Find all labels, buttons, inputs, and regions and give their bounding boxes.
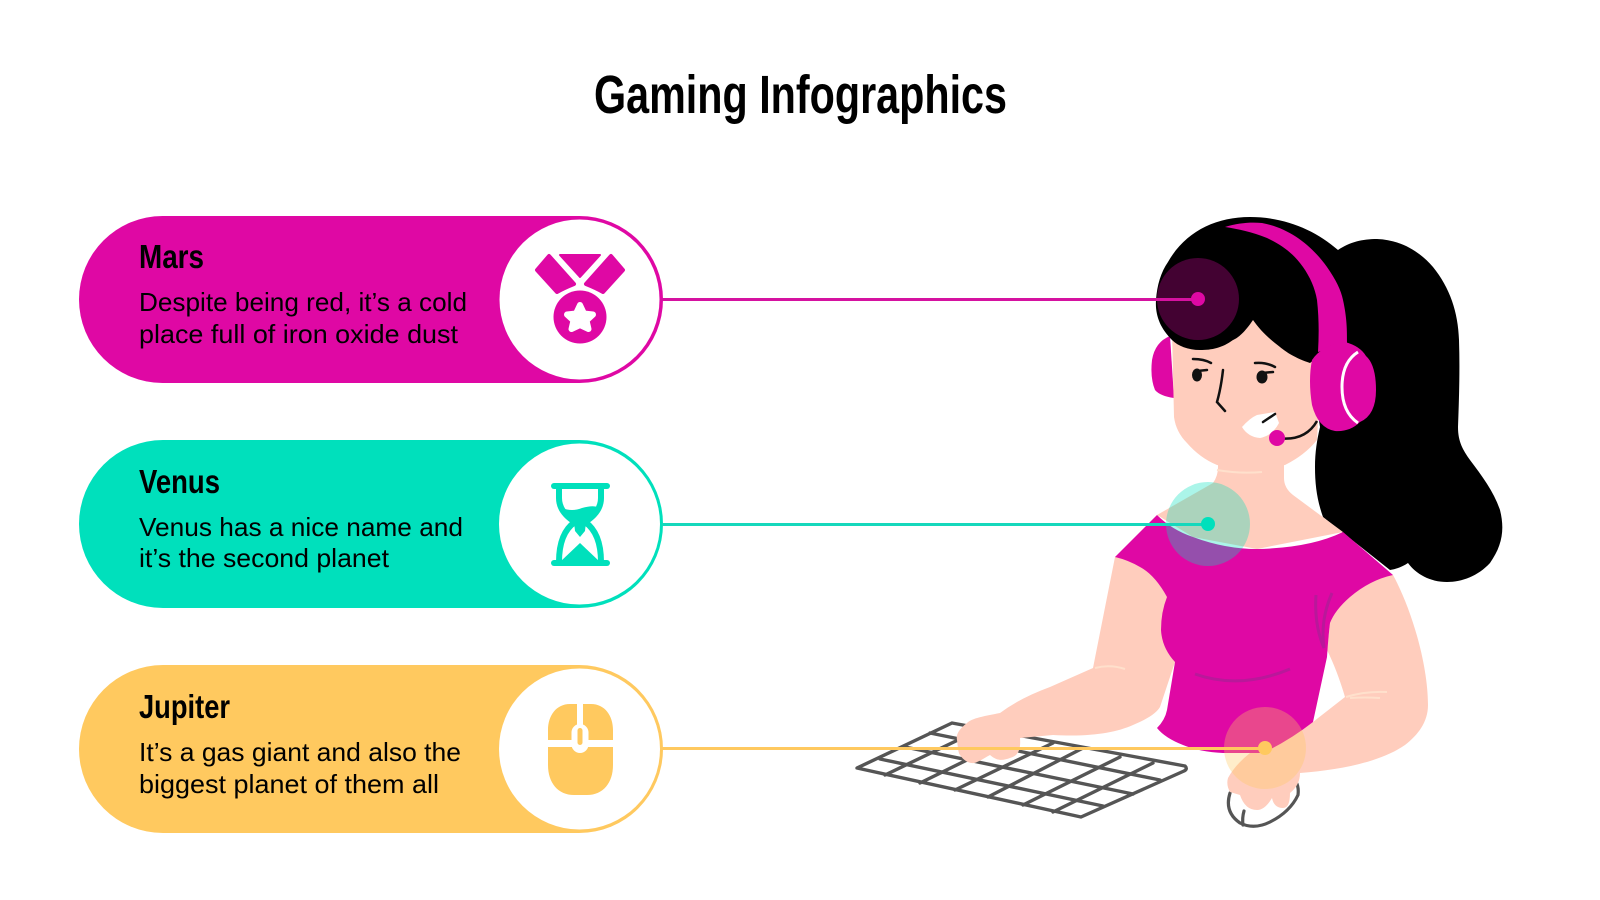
panel: Mars: [79, 216, 663, 383]
right arm and hand: [1227, 572, 1428, 810]
eyes and nose: [1193, 359, 1275, 411]
heading: Venus: Venus: [139, 463, 220, 500]
illustration: gamer girl: [857, 217, 1502, 826]
pointer: Jupiter: [662, 707, 1306, 789]
icon: medal: [537, 255, 623, 344]
heading: Jupiter: Jupiter: [139, 688, 230, 725]
text: Jupiter description: biggest planet of them all: [139, 769, 439, 799]
face: [1172, 310, 1322, 468]
arm creases: [1095, 470, 1387, 698]
mouth: [1242, 412, 1279, 438]
panel: Venus: [79, 440, 663, 608]
text: Mars description: Despite being red, it’s a cold: [139, 287, 467, 317]
headband: [1225, 223, 1347, 352]
left ear cup: [1151, 336, 1174, 398]
right ear cup: [1310, 342, 1376, 431]
microphone: [1277, 421, 1317, 439]
icon: hourglass: [551, 483, 610, 566]
text: Jupiter description: It’s a gas giant and also the: [139, 737, 461, 767]
mouse outline: [1228, 782, 1298, 826]
back hair: [1300, 239, 1502, 582]
neck: [1157, 460, 1343, 549]
ear cup highlight: [1342, 352, 1358, 423]
text: Venus description: [139, 512, 463, 573]
shirt creases: [1195, 593, 1332, 681]
shirt: [1115, 515, 1393, 753]
text: Venus description: Venus has a nice name and: [139, 512, 463, 542]
front hair: [1156, 217, 1350, 363]
panel: Jupiter: [79, 665, 663, 833]
keyboard: [857, 723, 1186, 817]
text: Jupiter description: [139, 737, 461, 799]
heading: Mars: Mars: [139, 238, 204, 275]
text: Venus description: it’s the second planet: [139, 543, 390, 573]
pointer: Mars: [662, 258, 1239, 340]
pointer: Venus: [662, 482, 1250, 566]
icon: mouse: [548, 704, 613, 795]
left arm: [957, 550, 1180, 763]
text: Mars description: place full of iron oxide dust: [139, 319, 459, 349]
text: Mars description: [139, 287, 467, 349]
title: Gaming Infographics: [594, 65, 1007, 125]
